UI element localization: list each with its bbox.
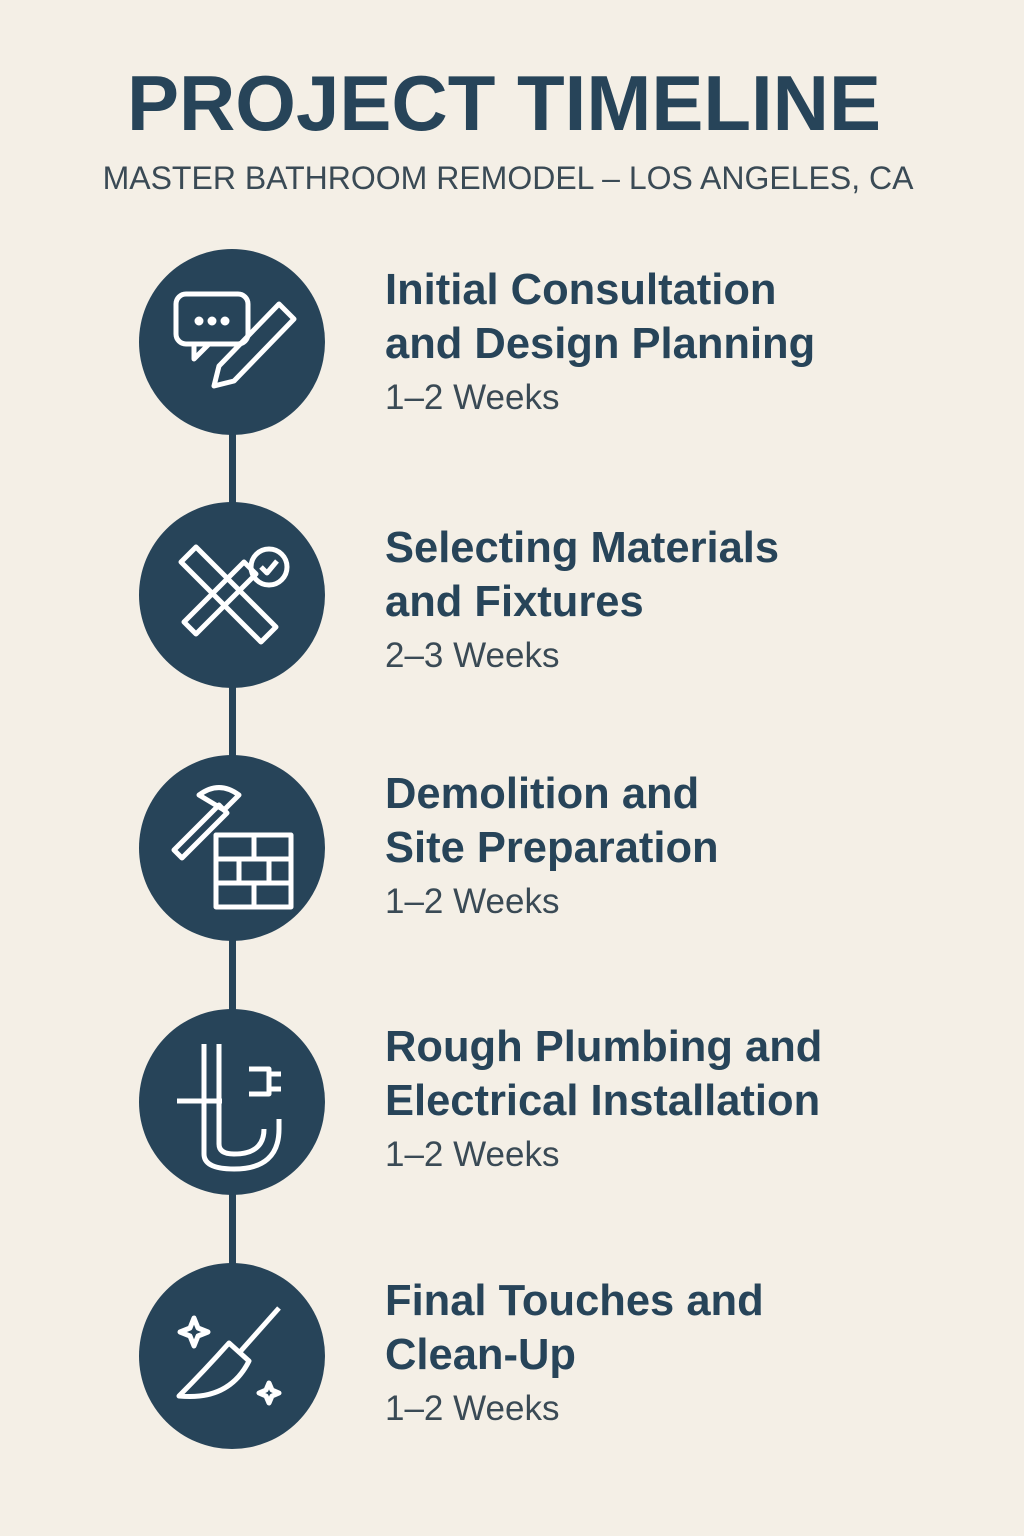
step 4 text: Electrical Installation [385, 1077, 820, 1125]
step 3 text [385, 770, 719, 872]
title: PROJECT TIMELINE [127, 59, 881, 147]
text: 1–2 Weeks [385, 1135, 559, 1174]
step 2 text: Selecting Materials [385, 524, 779, 572]
connector line [229, 340, 236, 1340]
step 4 text [385, 1023, 822, 1125]
step 1 text: Initial Consultation [385, 266, 776, 314]
step 5 text: Clean-Up [385, 1331, 576, 1379]
text: 1–2 Weeks [385, 1389, 559, 1428]
step 2 text [385, 524, 779, 626]
step 2 text: and Fixtures [385, 578, 644, 626]
icon: ruler and check [139, 502, 325, 688]
step 1 text: and Design Planning [385, 320, 815, 368]
icon: broom and sparkles [139, 1263, 325, 1449]
icon: hammer and bricks [139, 755, 325, 941]
step 3 text: Site Preparation [385, 824, 719, 872]
step 3 text: Demolition and [385, 770, 699, 818]
step 5 text [385, 1277, 764, 1379]
step 5 text: Final Touches and [385, 1277, 764, 1325]
text: 1–2 Weeks [385, 882, 559, 921]
icon: chat and pencil [139, 249, 325, 435]
icon: pipe and plug [139, 1009, 325, 1195]
text: 1–2 Weeks [385, 378, 559, 417]
step 4 text: Rough Plumbing and [385, 1023, 822, 1071]
step 1 text [385, 266, 815, 368]
text: 2–3 Weeks [385, 636, 559, 675]
subtitle: MASTER BATHROOM REMODEL – LOS ANGELES, CA [103, 160, 913, 196]
